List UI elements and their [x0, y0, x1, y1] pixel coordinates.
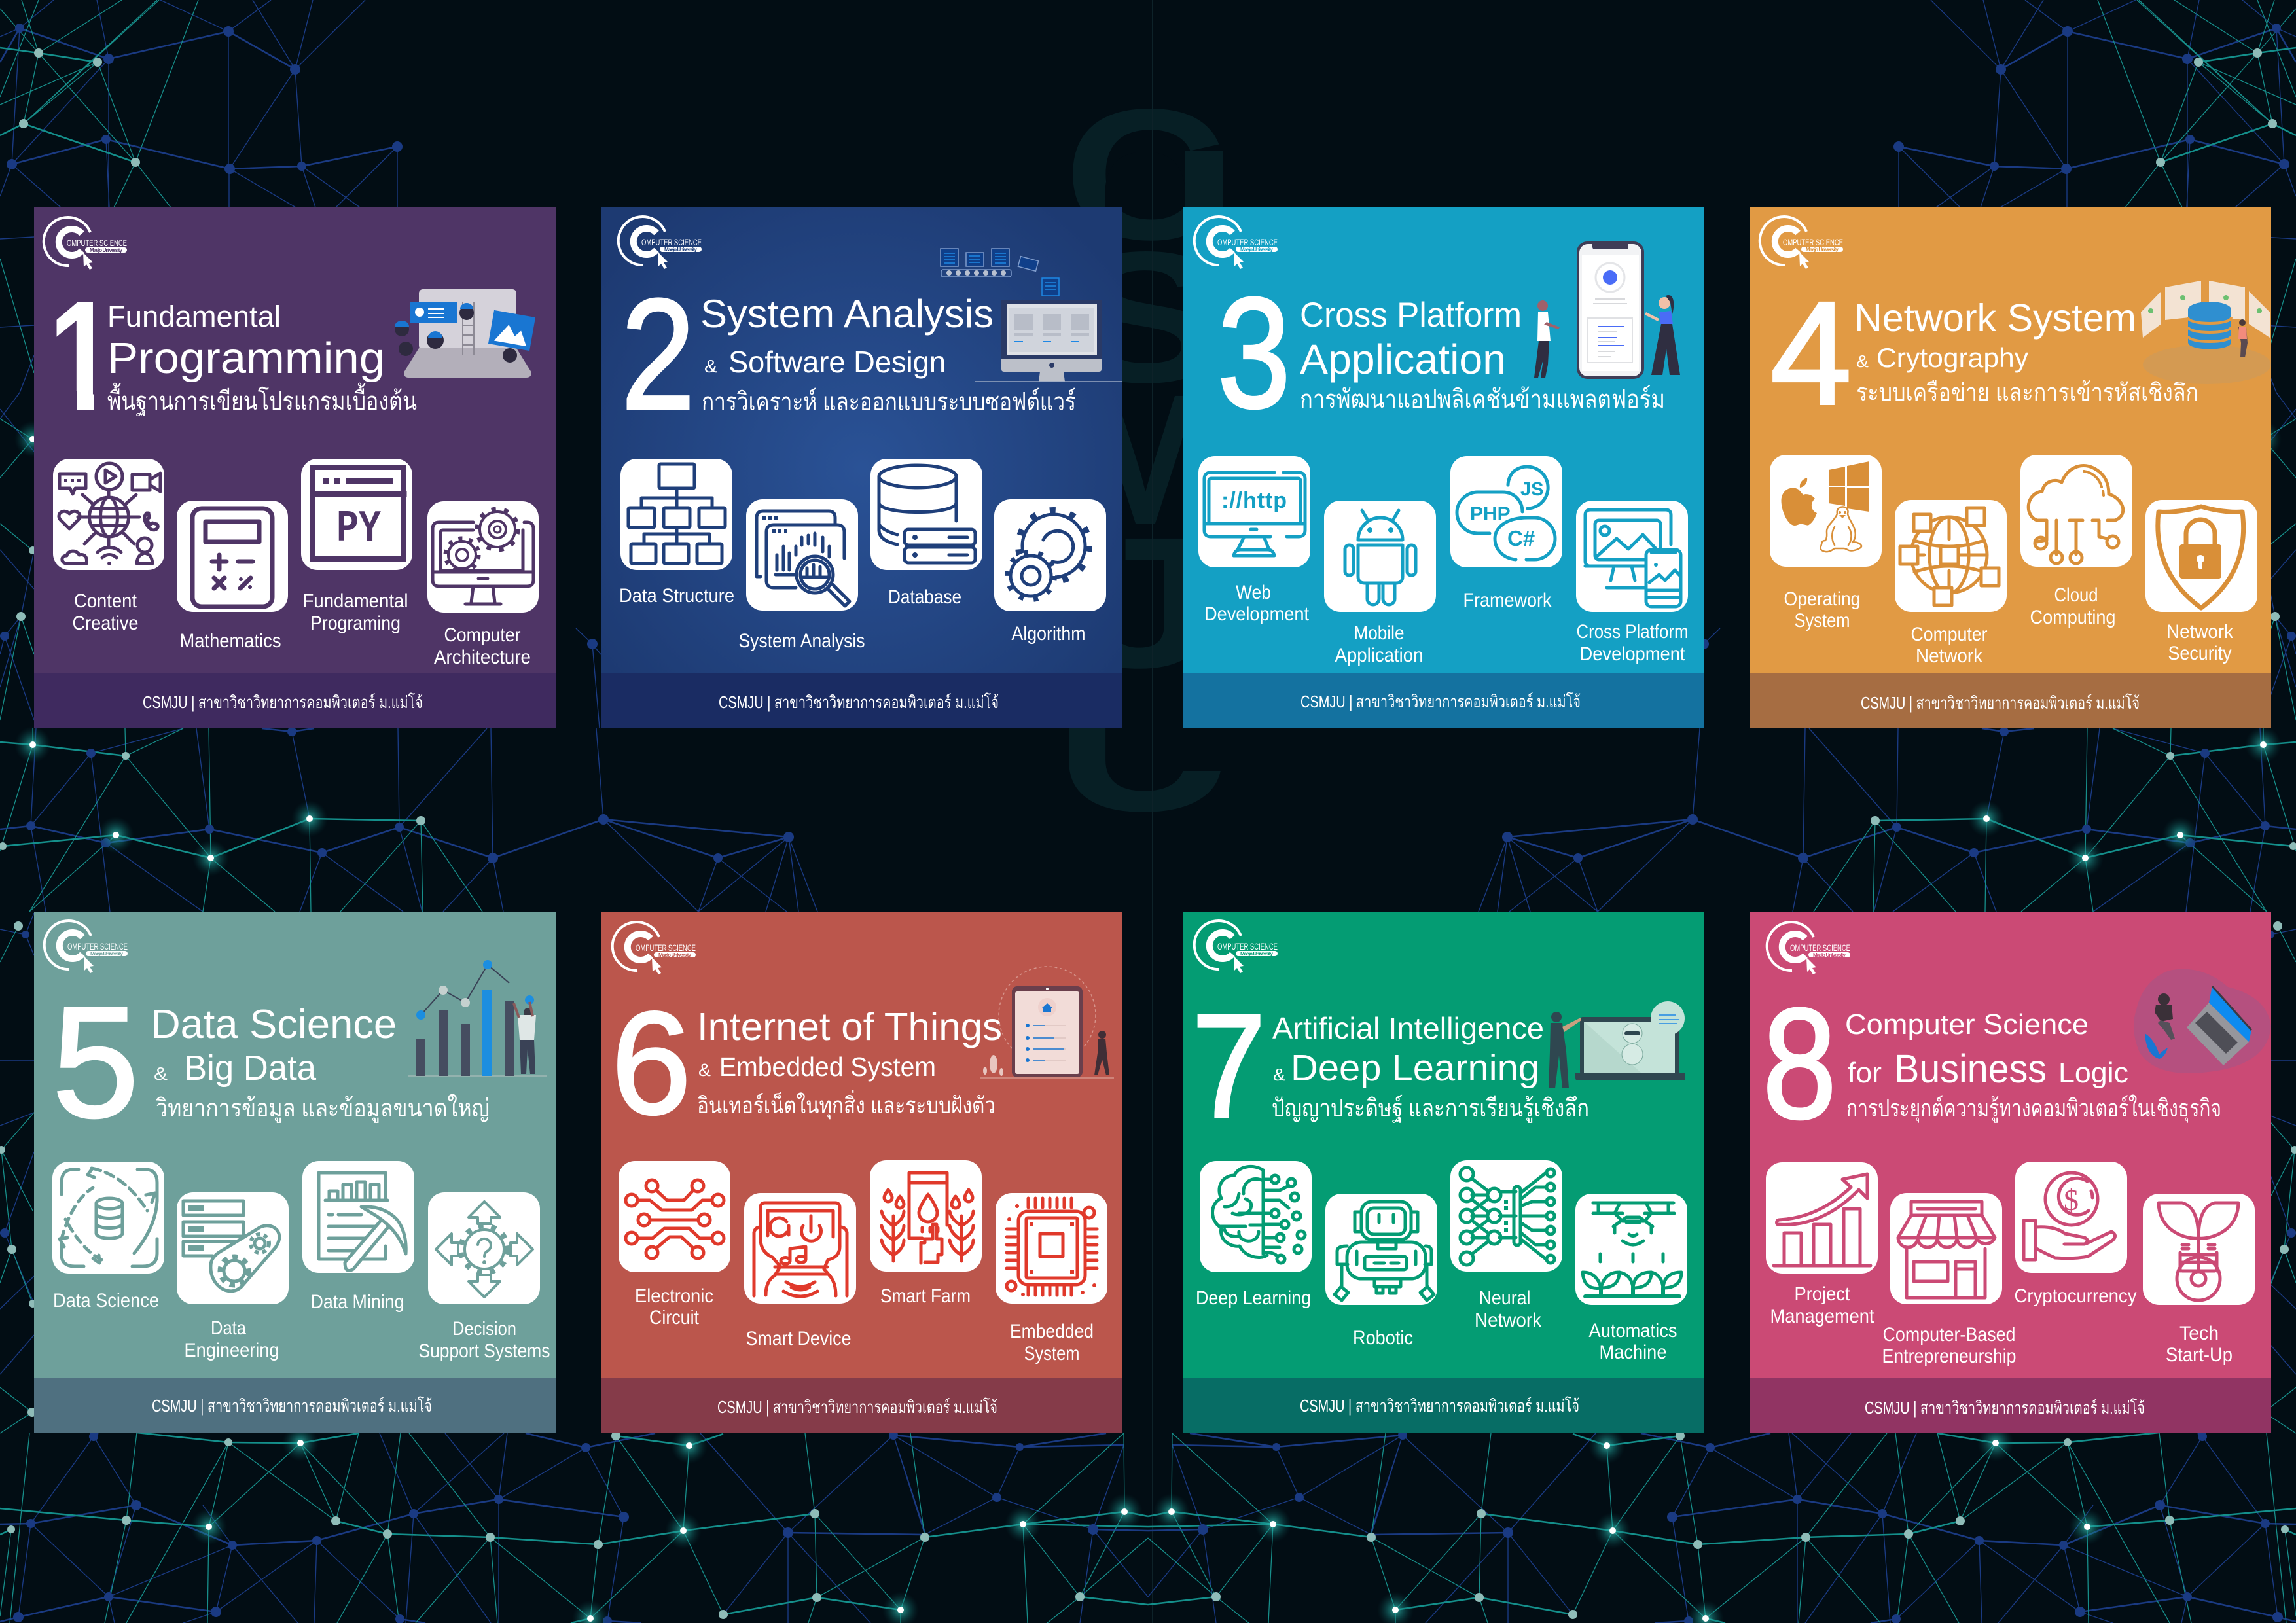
footer text: CSMJU | สาขาวิชาวิทยาการคอมพิวเตอร์ ม.แม่โจ้: [1300, 1396, 1579, 1416]
title: Software Design: [728, 345, 946, 379]
panel 4: Network System: [1750, 207, 2271, 728]
logo: [44, 217, 127, 270]
card: Cloud Computing: [2020, 455, 2132, 567]
icon: os logos: [1782, 461, 1869, 552]
card: Web Development: [1198, 456, 1310, 567]
title: [1854, 296, 2198, 406]
logo: OMPUTER SCIENCE: [1217, 942, 1278, 952]
title: อินเทอร์เน็ตในทุกสิ่ง และระบบฝังตัว: [697, 1090, 996, 1119]
card: Data Structure: [620, 459, 732, 570]
icon: http monitor: [1204, 473, 1305, 556]
logo: Maejo University: [664, 247, 698, 253]
title: Logic: [2058, 1057, 2128, 1089]
title: วิทยาการข้อมูล และข้อมูลขนาดใหญ่: [156, 1094, 490, 1123]
icon: monitor and phone: [1585, 510, 1681, 607]
label: Content: [74, 590, 137, 612]
title: &: [1273, 1065, 1285, 1084]
title: [151, 1002, 490, 1123]
card: Algorithm: [994, 499, 1106, 611]
icon: chip: [1007, 1198, 1097, 1296]
label: Data Structure: [619, 585, 734, 607]
card: Electronic Circuit: [619, 1161, 730, 1272]
panel 7: Artificial Intelligence: [1183, 912, 1704, 1433]
title: การวิเคราะห์ และออกแบบระบบซอฟต์แวร์: [702, 387, 1076, 416]
label: [1911, 624, 1988, 667]
label: Framework: [1463, 590, 1552, 611]
illustration: phone and people: [1534, 241, 1680, 379]
card: Framework: [1450, 456, 1562, 567]
icon: http monitor: ://http: [1221, 488, 1287, 513]
title: Big Data: [184, 1048, 317, 1088]
title: Data Science: [151, 1002, 397, 1047]
footer text: CSMJU | สาขาวิชาวิทยาการคอมพิวเตอร์ ม.แม่โจ้: [1300, 692, 1581, 711]
logo: OMPUTER SCIENCE: [636, 943, 696, 953]
title: ปัญญาประดิษฐ์ และการเรียนรู้เชิงลึก: [1272, 1094, 1589, 1123]
label: Project: [1795, 1283, 1850, 1305]
number 6: 6: [611, 982, 691, 1145]
icon: circuit: [626, 1180, 724, 1258]
watermark CSMJU: J: [1067, 499, 1223, 707]
card: Data Mining: [302, 1161, 414, 1273]
label: [635, 1285, 713, 1329]
title: [1845, 1008, 2221, 1123]
panel 6: Internet of Things: [601, 912, 1122, 1433]
title: System Analysis: [700, 292, 994, 336]
card: Fundamental Programing: [301, 459, 412, 570]
icon: shop: [1898, 1202, 1995, 1298]
logo: [1194, 921, 1278, 973]
label: [72, 590, 139, 634]
label: Neural: [1479, 1287, 1530, 1309]
number 2: 2: [621, 266, 695, 442]
watermark CSMJU: U: [1054, 642, 1237, 850]
label: Architecture: [434, 647, 531, 668]
number 7: 7: [1192, 984, 1266, 1148]
label: Fundamental: [302, 590, 408, 612]
icon: globe network: [1900, 508, 1999, 605]
card: Computer-Based Entrepreneurship: [1890, 1193, 2002, 1304]
icon: brain circuit: [1212, 1166, 1305, 1263]
title: &: [704, 356, 717, 376]
number 1: 1: [48, 268, 115, 444]
icon: storage gears: [183, 1201, 279, 1291]
card: Neural Network: [1450, 1160, 1562, 1272]
illustration: bar chart with person: [408, 960, 547, 1076]
label: Start-Up: [2166, 1344, 2233, 1366]
label: Network: [1475, 1310, 1542, 1331]
footer text: CSMJU | สาขาวิชาวิทยาการคอมพิวเตอร์ ม.แม่โจ้: [719, 692, 999, 712]
icon: python window: [313, 467, 404, 559]
illustration: robot on laptop: [1549, 1001, 1685, 1088]
title: Business: [1894, 1046, 2047, 1091]
label: Robotic: [1353, 1327, 1413, 1349]
label: Smart Farm: [880, 1285, 971, 1307]
label: [2166, 621, 2234, 664]
label: Embedded: [1010, 1321, 1094, 1342]
logo: Maejo University: [1240, 951, 1274, 957]
label: Database: [888, 586, 961, 608]
label: System Analysis: [738, 630, 865, 652]
label: Mobile: [1354, 622, 1405, 644]
number 8: 8: [1763, 976, 1837, 1151]
label: Management: [1770, 1306, 1874, 1327]
footer text: CSMJU | สาขาวิชาวิทยาการคอมพิวเตอร์ ม.แม่โจ้: [143, 692, 423, 712]
label: Tech: [2179, 1323, 2219, 1344]
card: Mobile Application: [1324, 501, 1436, 612]
watermark CSMJU: S: [1067, 213, 1223, 421]
icon: gears: [1007, 510, 1089, 600]
label: Data: [211, 1317, 246, 1339]
title: Internet of Things: [697, 1005, 1002, 1048]
label: [1770, 1283, 1874, 1327]
logo: Maejo University: [1806, 247, 1839, 253]
card: Decision Support Systems: [428, 1192, 540, 1304]
label: System: [1024, 1343, 1080, 1364]
label: Data Mining: [310, 1291, 404, 1313]
label: Entrepreneurship: [1882, 1346, 2016, 1367]
card: Tech Start-Up: [2143, 1194, 2255, 1305]
card: Network Security: [2145, 500, 2257, 612]
icon: android: [1345, 510, 1416, 605]
panel 2: System Analysis: [601, 207, 1122, 728]
label: Computer: [444, 624, 521, 646]
icon: code languages: PHP: [1470, 503, 1511, 525]
label: Computing: [2030, 607, 2115, 628]
card: Operating System: [1770, 455, 1882, 567]
icon: monitor gears: [433, 509, 533, 604]
card: Project Management: [1766, 1162, 1878, 1274]
icon: code languages: [1457, 467, 1555, 560]
logo: Maejo University: [90, 247, 123, 253]
label: [185, 1317, 279, 1361]
title: พื้นฐานการเขียนโปรแกรมเบื้องต้น: [107, 382, 417, 416]
label: Deep Learning: [1196, 1287, 1311, 1309]
card: Data Engineering: [177, 1192, 289, 1304]
footer text: CSMJU | สาขาวิชาวิทยาการคอมพิวเตอร์ ม.แม่โจ้: [1861, 693, 2140, 713]
icon: shield lock: [2158, 507, 2244, 608]
panel 5: Data Science: [34, 912, 556, 1433]
label: Network: [1916, 645, 1983, 667]
label: Network: [2166, 621, 2234, 643]
label: Automatics: [1589, 1320, 1677, 1342]
label: Computer: [1911, 624, 1988, 645]
label: Security: [2168, 643, 2232, 664]
logo: Maejo University: [658, 952, 692, 958]
card: Smart Device: [744, 1193, 856, 1304]
card: Data Science: [52, 1162, 164, 1274]
label: Algorithm: [1012, 623, 1085, 645]
title: for: [1848, 1057, 1882, 1089]
title: Application: [1300, 336, 1506, 383]
panel 1: Fundamental Programming: [34, 207, 556, 728]
footer text: CSMJU | สาขาวิชาวิทยาการคอมพิวเตอร์ ม.แม่โจ้: [717, 1397, 997, 1417]
icon: calculator: [192, 508, 272, 607]
label: [1335, 622, 1423, 666]
number 3: 3: [1217, 265, 1291, 440]
title: [700, 292, 1076, 416]
label: Cryptocurrency: [2015, 1285, 2136, 1307]
watermark CSMJU: C: [1064, 71, 1227, 279]
label: Decision: [452, 1318, 516, 1340]
logo: OMPUTER SCIENCE: [1217, 238, 1278, 247]
icon: document pickaxe: [319, 1173, 406, 1270]
illustration: monitor and conveyor: [941, 249, 1122, 382]
label: [419, 1318, 550, 1362]
label: [1576, 621, 1689, 665]
title: Programming: [107, 334, 385, 383]
logo: OMPUTER SCIENCE: [67, 238, 127, 248]
illustration: database screens: [2141, 281, 2271, 384]
footer text: CSMJU | สาขาวิชาวิทยาการคอมพิวเตอร์ ม.แม่โจ้: [152, 1396, 432, 1416]
logo: [1194, 217, 1278, 269]
title: &: [1856, 351, 1869, 371]
panel 3: Cross Platform Application: [1183, 207, 1704, 728]
title: [1300, 296, 1665, 414]
number 5: 5: [52, 974, 139, 1150]
card: System Analysis: [746, 499, 858, 611]
icon: database server: [879, 465, 975, 563]
icon: neural network: [1460, 1168, 1554, 1265]
logo: [1760, 217, 1843, 269]
watermark CSMJU: M: [1067, 356, 1223, 564]
icon: drone farming: [1583, 1203, 1681, 1296]
icon: python window: PY: [336, 504, 381, 554]
label: Circuit: [649, 1307, 700, 1329]
logo: [45, 921, 128, 973]
label: Cross Platform: [1576, 621, 1689, 643]
title: &: [154, 1063, 168, 1084]
logo: Maejo University: [90, 951, 124, 957]
title: &: [698, 1060, 711, 1080]
icon: tablet in hands: [754, 1203, 847, 1296]
icon: robot: [1335, 1202, 1434, 1300]
title: Deep Learning: [1291, 1047, 1539, 1089]
label: Web: [1236, 582, 1271, 603]
icon: content creative: [59, 463, 160, 565]
label: Cloud: [2054, 584, 2098, 606]
logo: Maejo University: [1813, 952, 1846, 958]
card: Computer Architecture: [427, 501, 539, 613]
logo: [1767, 922, 1850, 974]
label: Support Systems: [419, 1340, 550, 1362]
label: Operating: [1784, 588, 1860, 610]
card: Computer Network: [1895, 500, 2007, 612]
title: Embedded System: [719, 1052, 936, 1082]
card: Embedded System: [996, 1193, 1107, 1304]
label: [1475, 1287, 1542, 1331]
card: Content Creative: [53, 459, 164, 570]
icon: database cycle: [60, 1168, 157, 1266]
label: Development: [1580, 643, 1685, 665]
illustration: laptop blob: [2134, 969, 2271, 1073]
icon: growth chart: [1774, 1174, 1871, 1266]
illustration: laptop builders: [395, 289, 535, 378]
label: Engineering: [185, 1340, 279, 1361]
label: Mathematics: [179, 630, 281, 652]
illustration: smart home tablet: [980, 967, 1114, 1078]
icon: phone and wheat: [882, 1173, 973, 1263]
label: [1589, 1320, 1677, 1363]
label: [1010, 1321, 1094, 1364]
logo: Maejo University: [1240, 247, 1274, 253]
logo: OMPUTER SCIENCE: [1790, 943, 1850, 953]
title: Fundamental: [107, 300, 281, 333]
card: Deep Learning: [1200, 1161, 1312, 1272]
card: Mathematics: [177, 501, 288, 612]
label: [1882, 1324, 2016, 1367]
title: [107, 300, 417, 416]
label: Application: [1335, 645, 1423, 666]
card: Smart Farm: [870, 1160, 982, 1272]
icon: code languages: JS: [1520, 479, 1543, 500]
title: Crytography: [1876, 342, 2028, 373]
label: Development: [1204, 603, 1310, 625]
title: Network System: [1854, 296, 2136, 340]
panel 8: Computer Science for Business Logic: [1750, 912, 2271, 1433]
title: Artificial Intelligence: [1272, 1011, 1544, 1045]
icon: code languages: C#: [1507, 526, 1535, 550]
title: การพัฒนาแอปพลิเคชันข้ามแพลตฟอร์ม: [1300, 385, 1665, 414]
card: Automatics Machine: [1575, 1194, 1687, 1305]
label: [434, 624, 531, 668]
label: [2030, 584, 2115, 628]
label: Computer-Based: [1882, 1324, 2016, 1346]
card: Cryptocurrency: [2015, 1162, 2127, 1273]
icon: gear with arrows: [436, 1202, 533, 1297]
card: Database: [870, 459, 982, 570]
logo: [613, 922, 696, 974]
title: Cross Platform: [1300, 296, 1522, 334]
label: [2166, 1323, 2233, 1366]
label: [302, 590, 408, 634]
number 4: 4: [1770, 272, 1852, 435]
title: ระบบเครือข่าย และการเข้ารหัสเชิงลึก: [1856, 379, 2198, 406]
label: Creative: [72, 613, 139, 634]
icon: coin in hand: [2024, 1173, 2115, 1260]
icon: org chart: [628, 464, 725, 563]
logo: OMPUTER SCIENCE: [67, 942, 128, 952]
label: Data Science: [53, 1290, 159, 1311]
label: Programing: [310, 613, 401, 634]
label: [1204, 582, 1310, 625]
logo: OMPUTER SCIENCE: [1783, 238, 1843, 247]
icon: coin in hand: $: [2064, 1183, 2079, 1217]
title: [1272, 1011, 1589, 1123]
footer text: CSMJU | สาขาวิชาวิทยาการคอมพิวเตอร์ ม.แม่โจ้: [1865, 1398, 2145, 1418]
label: [1784, 588, 1860, 632]
icon: sprout bulb: [2159, 1203, 2238, 1300]
title: Computer Science: [1845, 1008, 2089, 1041]
logo: [619, 217, 702, 269]
logo: OMPUTER SCIENCE: [641, 238, 702, 247]
icon: chart magnifier: [757, 511, 850, 606]
label: Smart Device: [746, 1328, 851, 1349]
label: System: [1795, 610, 1850, 632]
label: Electronic: [635, 1285, 713, 1307]
icon: cloud: [2028, 465, 2123, 563]
watermark CSMJU: [1054, 0, 1237, 1623]
card: Cross Platform Development: [1576, 501, 1688, 612]
title: [697, 1005, 1002, 1119]
label: Machine: [1600, 1342, 1666, 1363]
card: Robotic: [1325, 1194, 1437, 1305]
